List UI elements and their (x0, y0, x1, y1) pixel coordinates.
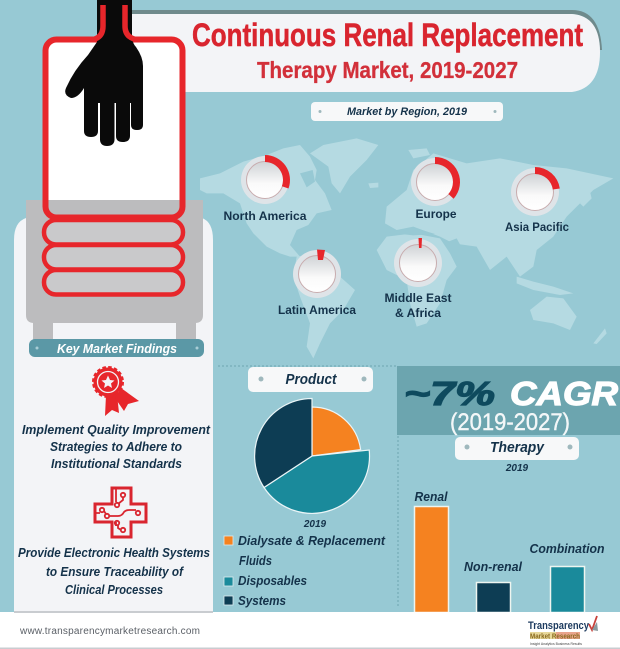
donut: North America: North America (224, 209, 307, 223)
donut: Middle East and Africa (384, 238, 452, 320)
bar: renal: Renal (414, 490, 448, 504)
pie legend (224, 533, 386, 608)
donut: Latin America: Latin America (278, 303, 356, 317)
therapy year label: 2019 (505, 463, 529, 474)
pie legend: Disposables (238, 573, 307, 588)
finding 1 text (22, 423, 211, 471)
bar: combination (530, 542, 605, 612)
logo: Transparency Market Research: Market Research (530, 634, 580, 640)
pill: therapy (455, 437, 579, 460)
icon: circuit medical cross (95, 488, 146, 537)
pill: product (248, 367, 373, 392)
footer band (0, 611, 620, 649)
logo: Transparency Market Research: Insight Analytics Business Results (530, 641, 582, 646)
slice: dialysate (312, 407, 361, 456)
donut: Middle East and Africa: Middle East (384, 291, 452, 305)
bar: combination: Combination (530, 542, 605, 556)
bar: non-renal (464, 560, 523, 612)
finding 1 text: Strategies to Adhere to (50, 440, 182, 454)
machine body (26, 200, 203, 323)
slice: systems (255, 398, 312, 488)
hand and arm (65, 0, 143, 146)
title line 2: Therapy Market, 2019-2027 (257, 57, 518, 83)
finding 2 text: Provide Electronic Health Systems (18, 546, 210, 560)
pill: therapy: Therapy (490, 440, 545, 456)
pie legend: Dialysate & Replacement (238, 533, 386, 548)
red tubing bag outline (46, 40, 182, 218)
dialysis device illustration (26, 0, 203, 340)
pie legend: Systems (238, 593, 286, 608)
donut: Latin America (278, 250, 356, 317)
pill: market by region: Market by Region, 2019 (347, 106, 468, 118)
donut: Middle East and Africa: & Africa (395, 306, 441, 320)
fluid bag (46, 40, 182, 200)
logo: Transparency Market Research: Transparency (528, 620, 590, 632)
website url: www.transparencymarketresearch.com (19, 626, 200, 637)
pill: product: Product (286, 371, 337, 388)
CAGR callout: CAGR (510, 375, 618, 412)
finding 2 text: Clinical Processes (65, 583, 163, 597)
finding 1 text: Implement Quality Improvement (22, 423, 211, 437)
finding 1 text: Institutional Standards (51, 457, 182, 471)
bar: renal (414, 490, 448, 612)
pill: key market findings: Key Market Findings (57, 341, 177, 356)
bar: non-renal: Non-renal (464, 560, 523, 574)
finding 2 text: to Ensure Traceability of (46, 565, 185, 579)
CAGR callout (397, 366, 620, 436)
donut: Asia Pacific (505, 167, 569, 234)
tubing coils (44, 220, 183, 294)
donut: North America (224, 155, 307, 223)
CAGR callout: (2019-2027) (450, 409, 570, 436)
donut: Asia Pacific: Asia Pacific (505, 220, 569, 234)
tube in arm (95, 5, 134, 39)
pie chart: product (255, 398, 369, 513)
pie year label: 2019 (303, 519, 327, 530)
donut: Europe: Europe (416, 207, 457, 221)
pill: key market findings (29, 339, 204, 357)
machine legs (33, 320, 196, 340)
pill: market by region (311, 102, 503, 121)
donut: Europe (411, 157, 460, 221)
logo: Transparency Market Research (528, 616, 598, 646)
slice: disposables (264, 450, 369, 513)
world map (200, 138, 613, 358)
left findings panel (14, 218, 213, 612)
pie legend: Fluids (239, 553, 272, 568)
title banner (130, 10, 602, 92)
icon: ribbon award (94, 368, 139, 416)
CAGR callout: ~7% (404, 375, 495, 412)
finding 2 text (18, 546, 210, 597)
